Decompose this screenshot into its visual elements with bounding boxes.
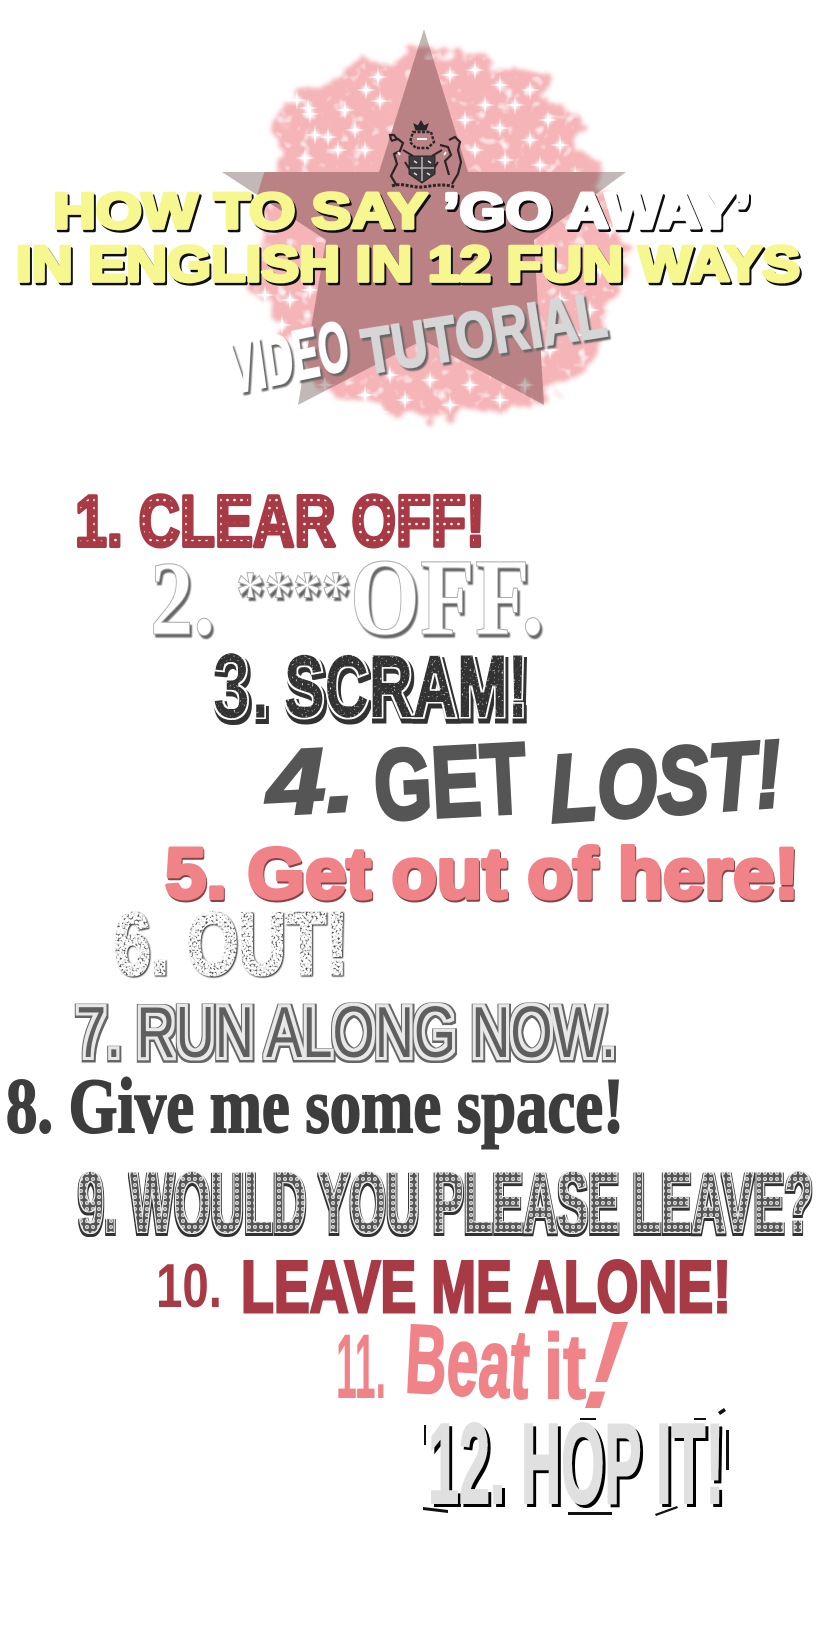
item 2: **** off <box>150 536 544 658</box>
item 3: scram: SCRAM! <box>284 639 528 735</box>
item 4: get lost <box>261 721 785 843</box>
item 11: beat it: it <box>544 1316 586 1418</box>
item 7: run along now: 7. RUN ALONG NOW. <box>76 993 616 1073</box>
title <box>16 183 800 292</box>
item 3: scram: 3. <box>212 633 270 738</box>
item 8: give me some space: 8. Give me some space! <box>6 1062 624 1149</box>
item 4: get lost: GET <box>371 722 529 842</box>
item 2: **** off: 2. <box>150 540 215 657</box>
tutorial word: TUTORIAL <box>357 278 611 388</box>
item 2: **** off: **** <box>236 558 350 631</box>
item 6: out: 6. OUT! <box>114 894 348 993</box>
item 1: clear off: 1. CLEAR OFF! <box>75 482 485 562</box>
item 11: beat it <box>336 1296 647 1435</box>
item 5: get out of here: 5. Get out of here! <box>165 835 799 914</box>
video label <box>223 278 611 409</box>
item 4: get lost: 4. <box>261 729 357 835</box>
video word: VIDEO <box>223 306 353 409</box>
pink glitter blob <box>251 50 628 422</box>
item 3: scram <box>212 633 528 738</box>
item 10: leave me alone: 10. <box>156 1252 222 1321</box>
item 2: **** off: OFF. <box>350 536 544 658</box>
title line 2: IN ENGLISH IN 12 FUN WAYS <box>16 236 800 292</box>
icon: royal coat of arms <box>390 121 461 187</box>
star <box>222 29 626 405</box>
item 11: beat it: 11. <box>336 1316 386 1418</box>
item 11: beat it: ! <box>566 1296 647 1435</box>
title line 1: HOW TO SAY ’GO AWAY’ <box>53 183 751 239</box>
item 11: beat it: Beat <box>403 1303 532 1419</box>
